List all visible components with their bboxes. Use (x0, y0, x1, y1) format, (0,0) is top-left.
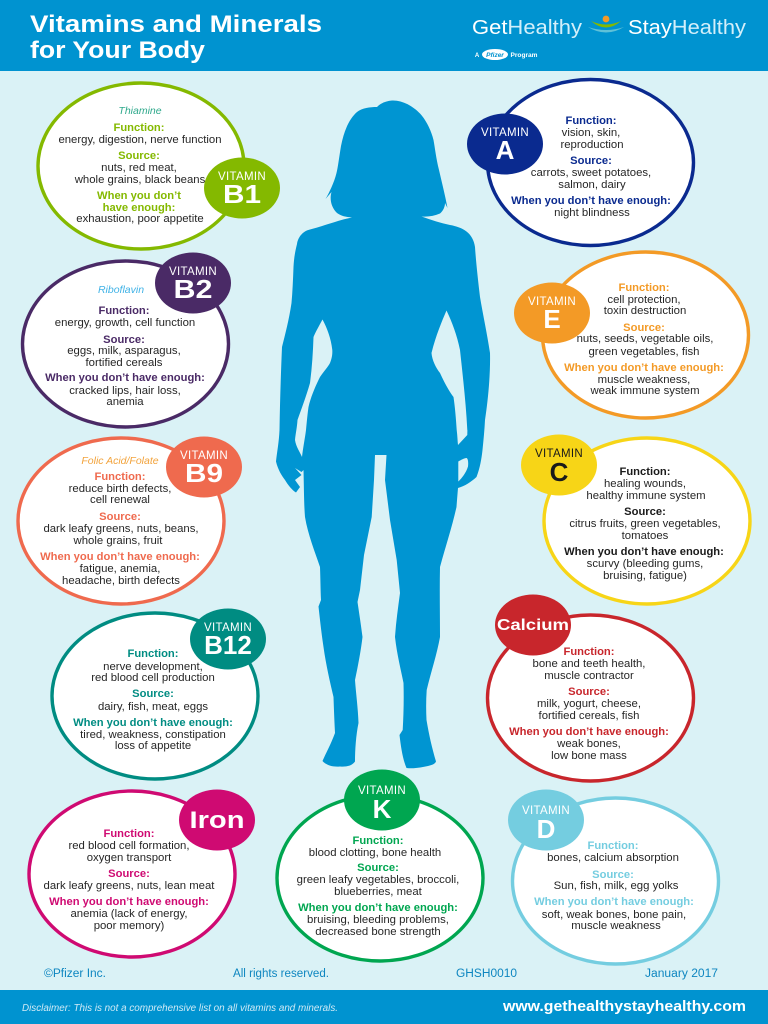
ring (277, 795, 483, 961)
text: D details: muscle weakness (571, 920, 661, 932)
ring (542, 252, 748, 418)
text: D details: Sun, fish, milk, egg yolks (554, 880, 679, 892)
badge: B9: B9 (185, 458, 223, 488)
text: C details: Source: (624, 506, 666, 518)
text: E details: cell protection, (607, 294, 681, 306)
badge: Iron (179, 790, 255, 850)
logo: A Pfizer Program (475, 49, 538, 60)
badge: E: VITAMIN (528, 296, 576, 308)
disclaimer: Disclaimer: This is not a comprehensive list on all vitamins and minerals. (22, 1003, 338, 1014)
badge: B9: VITAMIN (180, 450, 228, 462)
text: B2 details: Function: (99, 305, 149, 317)
text: A details: carrots, sweet potatoes, (531, 167, 651, 179)
text: B9 details: fatigue, anemia, (80, 563, 160, 575)
badge: K: VITAMIN (358, 785, 406, 797)
text: Calcium details: fortified cereals, fish (539, 710, 639, 722)
badge: C: C (550, 457, 569, 487)
badge: D (508, 790, 584, 850)
text: B12 details: nerve development, (103, 661, 203, 673)
ring (29, 791, 235, 957)
ring (52, 613, 258, 779)
text: D details: soft, weak bones, bone pain, (542, 909, 686, 921)
text: B1 details: Function: (114, 122, 164, 134)
text: Calcium details: Source: (568, 686, 610, 698)
text: B12 details: When you don’t have enough: (73, 717, 233, 729)
panel: Vitamin C (521, 434, 750, 604)
text: D details: bones, calcium absorption (547, 852, 679, 864)
text: B2 details: When you don’t have enough: (45, 372, 205, 384)
body silhouette (276, 100, 490, 768)
badge: A (467, 114, 543, 174)
text: B9 details: Folic Acid/Folate (81, 455, 159, 467)
ring (38, 83, 244, 249)
panel: Vitamin B2 (22, 252, 231, 427)
logo: A Pfizer Program: Pfizer (486, 52, 504, 59)
text: C details: When you don’t have enough: (564, 546, 724, 558)
logo: A Pfizer Program: Program (510, 53, 538, 59)
text: B9 details: headache, birth defects (62, 575, 180, 587)
text: A details: Source: (570, 155, 612, 167)
panel: Vitamin A (467, 80, 694, 246)
text: B1 details: whole grains, black beans (74, 174, 206, 186)
panel: Iron (29, 790, 255, 957)
badge: B2: B2 (174, 274, 212, 304)
text: B1 details: energy, digestion, nerve function (58, 134, 222, 146)
text: E details: weak immune system (589, 385, 700, 397)
text: B9 details: When you don’t have enough: (40, 551, 200, 563)
text: B2 details: cracked lips, hair loss, (69, 385, 181, 397)
website: www.gethealthystayhealthy.com (502, 998, 746, 1015)
badge: B12 (190, 608, 266, 670)
text: C details (564, 466, 724, 582)
text: Calcium details: milk, yogurt, cheese, (537, 698, 641, 710)
badge: E (514, 282, 590, 344)
text: K details: green leafy vegetables, broccoli, (297, 874, 459, 886)
ring (488, 80, 694, 246)
credits line: January 2017 (645, 968, 718, 980)
badge: A: A (496, 135, 515, 165)
text: Iron details: Source: (108, 868, 150, 880)
badge: Calcium (495, 594, 571, 656)
logo: A Pfizer Program: A (475, 53, 480, 59)
badge: A: VITAMIN (481, 127, 529, 139)
text: Calcium details: low bone mass (551, 750, 627, 762)
text: K details: blood clotting, bone health (309, 847, 441, 859)
text: B2 details: energy, growth, cell function (55, 317, 195, 329)
text: B2 details: fortified cereals (86, 357, 163, 369)
text: C details: healthy immune system (586, 490, 706, 502)
text: B12 details: loss of appetite (115, 740, 191, 752)
text: C details: tomatoes (622, 530, 669, 542)
logo: Get Healthy Stay Healthy (472, 16, 747, 39)
badge: K: K (373, 794, 392, 824)
ring (544, 438, 750, 604)
title: Vitamins and Minerals (30, 11, 322, 38)
ring (18, 438, 224, 604)
panel: Vitamin E (514, 252, 748, 418)
text: Iron details: red blood cell formation, (68, 840, 190, 852)
text: Iron details (44, 828, 215, 932)
text: A details: vision, skin, (562, 127, 620, 139)
credits line: ©Pfizer Inc. (44, 968, 106, 980)
text: Calcium details: Function: (564, 646, 614, 658)
credits line: GHSH0010 (456, 968, 517, 980)
text: Iron details: anemia (lack of energy, (70, 908, 188, 920)
text: B12 details: Function: (128, 648, 178, 660)
icon: logo smile (588, 16, 624, 32)
text: Iron details: dark leafy greens, nuts, lean meat (44, 880, 215, 892)
text: B9 details: dark leafy greens, nuts, beans, (43, 523, 199, 535)
text: C details: citrus fruits, green vegetables, (569, 518, 721, 530)
header band (0, 0, 768, 71)
text: K details: When you don’t have enough: (298, 902, 458, 914)
text: C details: bruising, fatigue) (603, 570, 687, 582)
text: Iron details: When you don’t have enough: (49, 896, 209, 908)
badge: B1 (204, 158, 280, 218)
text: K details: Source: (357, 862, 399, 874)
text: D details (534, 840, 694, 932)
ring (488, 615, 694, 781)
panel: Vitamin B9 (18, 436, 242, 604)
panel: Vitamin B12 (52, 608, 266, 779)
text: K details: blueberries, meat (334, 886, 423, 898)
badge: B12: VITAMIN (204, 622, 252, 634)
footer band (0, 990, 768, 1024)
title (30, 11, 322, 64)
text: B12 details: Source: (132, 688, 174, 700)
text: K details: decreased bone strength (315, 926, 441, 938)
text: B1 details: have enough: (103, 202, 175, 214)
text: Calcium details: muscle contractor (544, 670, 634, 682)
text: B2 details: eggs, milk, asparagus, (67, 345, 181, 357)
text: A details: salmon, dairy (558, 179, 626, 191)
text: D details: Function: (588, 840, 638, 852)
text: B9 details: cell renewal (90, 494, 150, 506)
text: D details: Source: (592, 869, 634, 881)
text: Iron details: Function: (104, 828, 154, 840)
text: E details: nuts, seeds, vegetable oils, (577, 333, 713, 345)
badge: B1: B1 (223, 179, 261, 209)
panel: Calcium (488, 594, 694, 781)
text: B9 details: whole grains, fruit (73, 535, 163, 547)
badge: K (344, 770, 420, 830)
text: C details: Function: (620, 466, 670, 478)
text: A details: night blindness (554, 207, 630, 219)
text: C details: scurvy (bleeding gums, (587, 558, 703, 570)
logo: Get Healthy Stay Healthy: GetHealthy (472, 16, 583, 39)
text: B1 details: exhaustion, poor appetite (76, 213, 204, 225)
badge: D: D (537, 814, 555, 844)
text: A details: Function: (566, 115, 616, 127)
ring (22, 261, 228, 427)
text: B2 details (45, 284, 205, 408)
text: K details (297, 835, 459, 938)
text: Calcium details: bone and teeth health, (533, 658, 645, 670)
badge: D: VITAMIN (522, 805, 570, 817)
text: A details: reproduction (560, 139, 624, 151)
credits line (44, 968, 718, 980)
text: C details: healing wounds, (604, 478, 686, 490)
text: K details: bruising, bleeding problems, (307, 914, 449, 926)
text: E details: When you don’t have enough: (564, 362, 724, 374)
text: B9 details (40, 455, 200, 587)
text: E details (564, 282, 724, 397)
badge: C (521, 434, 597, 496)
text: K details: Function: (353, 835, 403, 847)
text: Iron details: poor memory) (94, 920, 165, 932)
text: B1 details (58, 105, 222, 225)
text: B1 details: When you don’t (97, 190, 181, 202)
panel: Vitamin K (277, 770, 483, 961)
text: Iron details: oxygen transport (87, 852, 172, 864)
badge: B1: VITAMIN (218, 171, 266, 183)
text: E details: green vegetables, fish (588, 346, 700, 358)
badge: C: VITAMIN (535, 448, 583, 460)
text: Calcium details: weak bones, (556, 738, 621, 750)
text: D details: When you don’t have enough: (534, 896, 694, 908)
text: A details: When you don’t have enough: (511, 195, 671, 207)
text: E details: muscle weakness, (598, 374, 690, 386)
text: Calcium details (509, 646, 669, 762)
panel: Vitamin D (508, 790, 718, 964)
text: B12 details: red blood cell production (91, 672, 215, 684)
badge: Iron: Iron (190, 807, 244, 834)
text: E details: Function: (619, 282, 669, 294)
text: B12 details: dairy, fish, meat, eggs (98, 701, 208, 713)
badge: B9 (166, 436, 242, 498)
text: E details: Source: (623, 322, 665, 334)
text: B9 details: Source: (99, 511, 141, 523)
title: for Your Body (30, 37, 205, 64)
text: B1 details: nuts, red meat, (101, 162, 177, 174)
text: B1 details: Thiamine (118, 105, 162, 117)
text: B9 details: Function: (95, 471, 145, 483)
text: B12 details: tired, weakness, constipation (80, 729, 226, 741)
credits line: All rights reserved. (233, 968, 329, 980)
panel: Vitamin B1 (38, 83, 280, 249)
text: B1 details: Source: (118, 150, 160, 162)
text: B2 details: Riboflavin (98, 284, 144, 296)
text: E details: toxin destruction (604, 305, 686, 317)
ring (512, 798, 718, 964)
badge: B12: B12 (204, 630, 252, 660)
text: B2 details: anemia (106, 396, 144, 408)
logo: Get Healthy Stay Healthy: StayHealthy (628, 16, 747, 39)
text: B12 details (73, 648, 233, 752)
text: B2 details: Source: (103, 334, 145, 346)
badge: B2: VITAMIN (169, 266, 217, 278)
badge: Calcium: Calcium (497, 617, 569, 634)
text: B9 details: reduce birth defects, (69, 483, 171, 495)
badge: B2 (155, 252, 231, 314)
badge: E: E (543, 304, 561, 334)
text: A details (511, 115, 671, 219)
text: Calcium details: When you don’t have enough: (509, 726, 669, 738)
